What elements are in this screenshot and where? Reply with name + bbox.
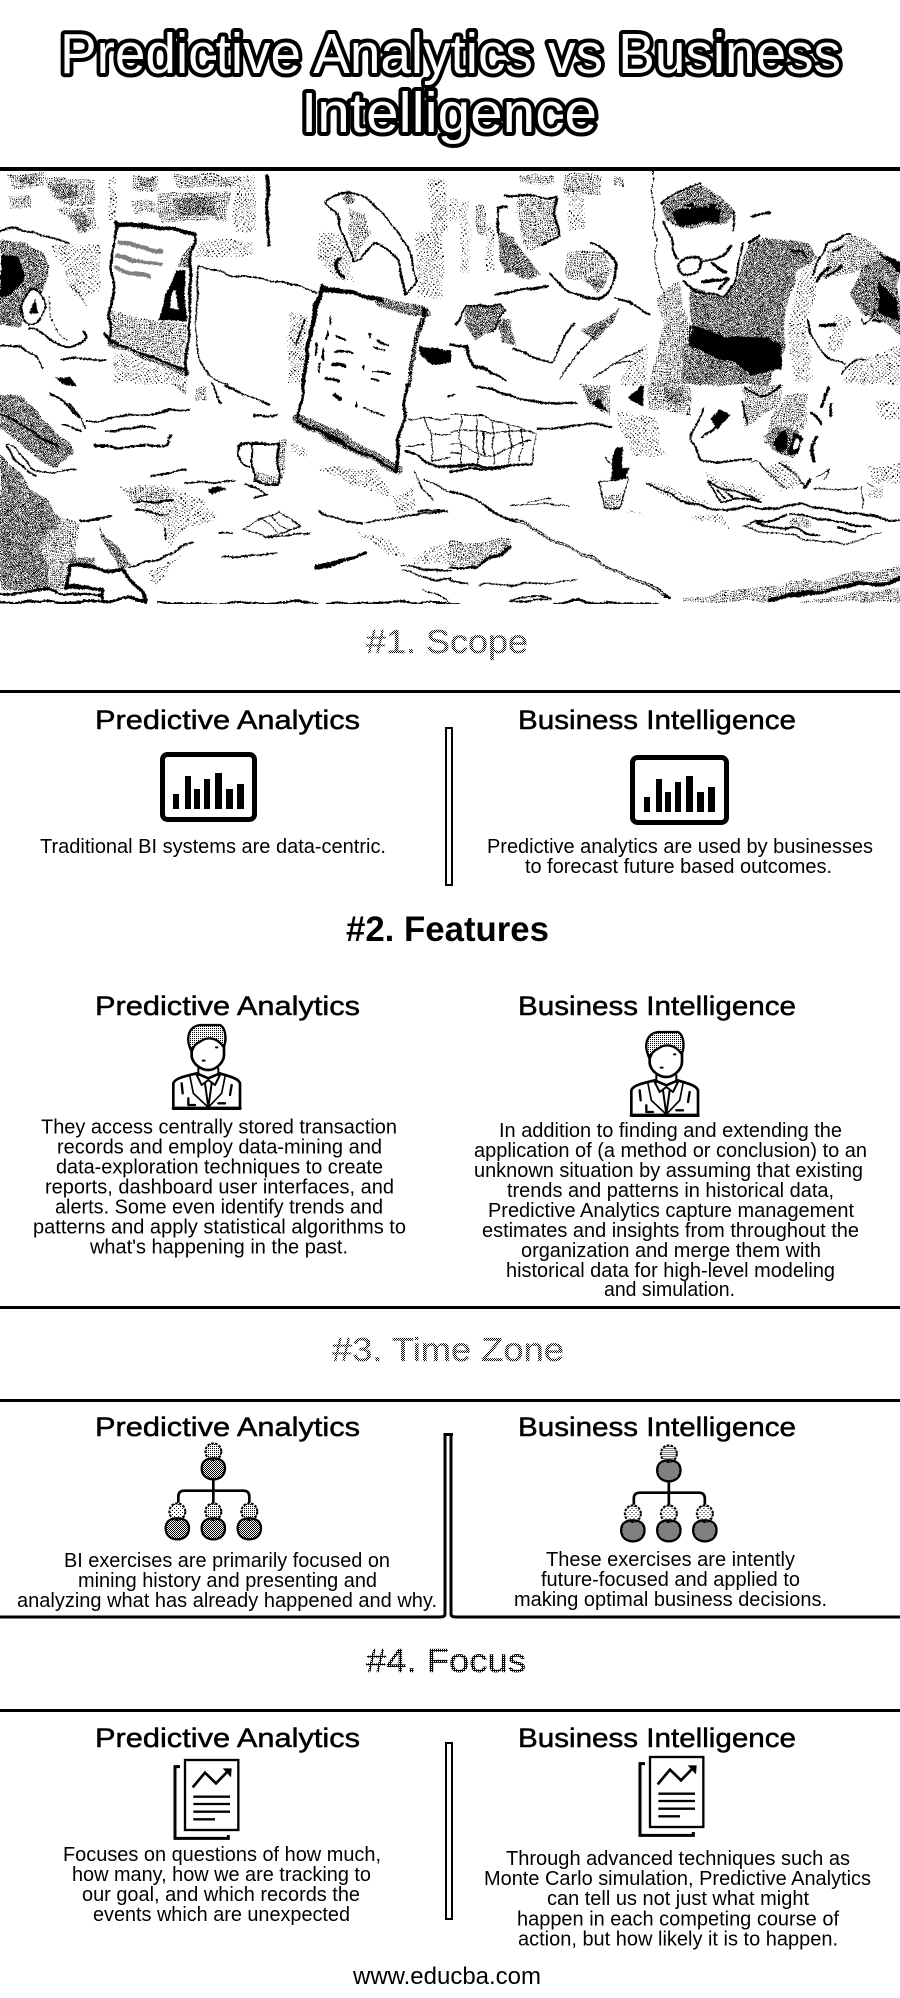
heading: #4. Focus: #4. Focus [366,1642,526,1679]
text: questions: how many, how we are tracking to [72,1864,371,1886]
text: data access: reports, dashboard user interfaces, and [45,1176,394,1198]
text: questions: Focuses on questions of how much, [63,1844,381,1866]
heading: business intelligence: Business Intelligence [518,991,796,1021]
text: traditional BI: Traditional BI systems are data-centric. [40,836,386,858]
heading: predictive analytics: Predictive Analytics [95,991,360,1021]
text: BI exercises: BI exercises are primarily focused on [64,1550,390,1572]
column: predictive analytics scope [40,705,386,858]
text: capture estimates: historical data for high-level modeling [506,1260,835,1282]
icon: report document [175,1760,238,1838]
text: capture estimates: and simulation. [604,1279,735,1301]
text: capture estimates: organization and merge them with [521,1240,821,1262]
text: capture estimates: trends and patterns in historical data, [507,1180,834,1202]
icon: bar chart [632,758,726,822]
text: data access: what's happening in the past. [89,1236,348,1258]
heading: #1. Scope: #1. Scope [366,623,528,660]
text: capture estimates [474,1120,867,1301]
heading: business intelligence: Business Intelligence [518,1723,796,1753]
heading: business intelligence: Business Intelligence [518,1412,796,1442]
text: data access: They access centrally stored transaction [41,1116,397,1138]
icon: bar chart [162,754,254,820]
section 4 panel: focus [0,1709,900,1950]
heading: #3. Time Zone [0,1306,900,1402]
text: questions: events which are unexpected [93,1904,350,1926]
heading: predictive analytics: Predictive Analytics [95,1412,360,1442]
text: capture estimates: Predictive Analytics capture management [488,1200,854,1222]
heading: business intelligence: Business Intelligence [518,705,796,735]
text: monte carlo: happen in each competing course of [517,1908,839,1930]
text: data access: alerts. Some even identify trends and [55,1196,383,1218]
icon: org chart [621,1445,716,1541]
text: data access: data-exploration techniques to create [56,1156,383,1178]
text: monte carlo [484,1848,871,1950]
heading: predictive analytics: Predictive Analytics [95,705,360,735]
title: Predictive Analytics vs Business [60,22,841,86]
column: predictive analytics time zone [17,1412,437,1612]
text: data access: patterns and apply statistical algorithms to [33,1216,406,1238]
text: BI exercises: analyzing what has already happened and why. [17,1590,437,1612]
text: questions [63,1844,381,1926]
column: predictive analytics features [33,991,406,1258]
column: business intelligence features [474,991,867,1301]
column: predictive analytics focus [63,1723,381,1926]
text: future-focused: future-focused and applied to [541,1569,800,1591]
text: BI exercises [17,1550,437,1612]
text: predictive analytics forecast [487,836,873,878]
text: data access: records and employ data-mining and [57,1136,382,1158]
heading: #3. Time Zone: #3. Time Zone [332,1331,564,1368]
icon: businessman [173,1025,240,1108]
text: future-focused: These exercises are intently [546,1549,795,1571]
column: business intelligence focus [484,1723,871,1950]
text: capture estimates: unknown situation by assuming that existing [474,1160,863,1182]
divider [446,728,452,885]
text: monte carlo: Through advanced techniques such as [506,1848,850,1870]
text: predictive analytics forecast: Predictive analytics are used by businesses [487,836,873,858]
section 2 panel: features [33,991,867,1301]
title [60,22,841,145]
text: capture estimates: application of (a method or conclusion) to an [474,1140,867,1162]
icon: org chart [166,1443,261,1539]
text: monte carlo: Monte Carlo simulation, Predictive Analytics [484,1868,871,1890]
title: Intelligence [301,81,597,145]
text: capture estimates: estimates and insights from throughout the [482,1220,859,1242]
column: business intelligence time zone [514,1412,827,1611]
text: monte carlo: can tell us not just what might [547,1888,809,1910]
column: business intelligence scope [487,705,873,878]
icon: businessman [631,1032,698,1115]
heading: #2. Features: #2. Features [346,910,549,949]
text: monte carlo: action, but how likely it is to happen. [518,1928,838,1950]
text: future-focused: making optimal business decisions. [514,1589,827,1611]
text: predictive analytics forecast: to forecast future based outcomes. [525,856,832,878]
divider [0,1433,900,1617]
footer url: www.educba.com [352,1963,541,1990]
text: future-focused [514,1549,827,1611]
heading: predictive analytics: Predictive Analytics [95,1723,360,1753]
section 1 panel: scope [0,690,900,885]
text: questions: our goal, and which records the [82,1884,360,1906]
text: BI exercises: mining history and presenting and [78,1570,377,1592]
section 3 panel: time zone [0,1412,900,1617]
divider [446,1743,452,1919]
icon: report document [640,1757,703,1835]
text: data access [33,1116,406,1258]
photo: team working at computers in an office [0,167,900,603]
text: capture estimates: In addition to finding and extending the [499,1120,842,1142]
